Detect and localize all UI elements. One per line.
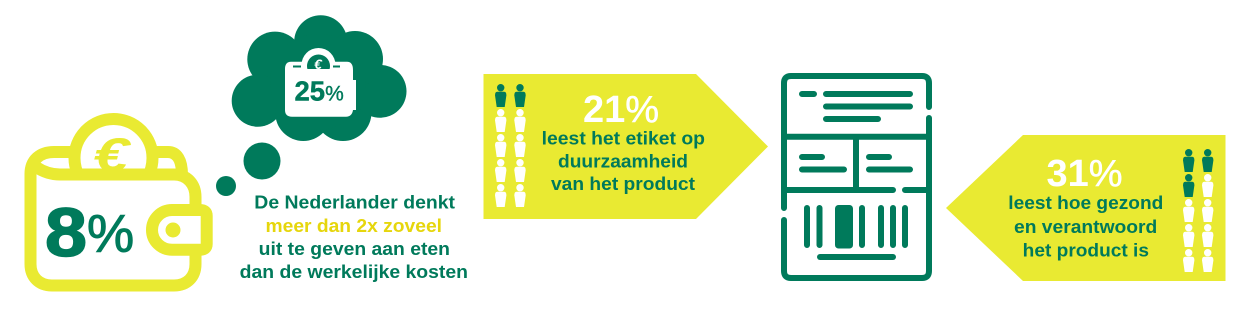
- caption 21%: van het product: [551, 173, 695, 194]
- icon: yellow wallet with 8%: [30, 119, 207, 286]
- value 31%: 31%: [1046, 153, 1123, 195]
- icon: yellow wallet with 8%: %: [87, 204, 134, 264]
- white wallet icon: [285, 48, 356, 117]
- dividers: [784, 137, 929, 190]
- caption 21%: [542, 127, 705, 194]
- middle text lines: [802, 157, 910, 170]
- wallet coin with euro: [68, 113, 158, 168]
- thought dots: [216, 142, 280, 196]
- value 21%: 21%: [583, 89, 659, 131]
- document outline: [784, 76, 929, 278]
- wallet coin with euro: €: [93, 128, 132, 181]
- text: De Nederlander denkt: uit te geven aan eten: [259, 238, 450, 259]
- text: De Nederlander denkt: meer dan 2x zoveel: [266, 215, 442, 236]
- wallet value 8%: 8: [45, 194, 87, 271]
- wallet body: [30, 152, 196, 286]
- white wallet icon: 25%: [294, 75, 344, 106]
- caption 31%: het product is: [1023, 240, 1149, 261]
- caption 31%: [1008, 192, 1163, 261]
- barcode: [807, 205, 905, 248]
- icon: product label document: [784, 76, 929, 278]
- barcode number line: [820, 254, 893, 260]
- caption 21%: duurzaamheid: [558, 151, 688, 172]
- wallet clasp: [152, 210, 207, 250]
- people pictogram 31%: [1183, 149, 1213, 272]
- caption 31%: en verantwoord: [1014, 216, 1157, 237]
- caption 31%: leest hoe gezond: [1008, 192, 1163, 213]
- caption 21%: leest het etiket op: [542, 127, 705, 148]
- text: De Nederlander denkt: dan de werkelijke kosten: [240, 261, 468, 282]
- panel: 21% arrow: [484, 74, 768, 219]
- text: De Nederlander denkt: [240, 192, 468, 282]
- white wallet icon: €: [314, 56, 323, 72]
- panel: 31% arrow: [946, 135, 1226, 281]
- cloud: [232, 15, 406, 141]
- top text lines: [802, 94, 910, 119]
- thought bubble with 25%: [216, 15, 406, 196]
- text: De Nederlander denkt: De Nederlander denkt: [254, 192, 455, 212]
- people pictogram 21%: [495, 84, 526, 207]
